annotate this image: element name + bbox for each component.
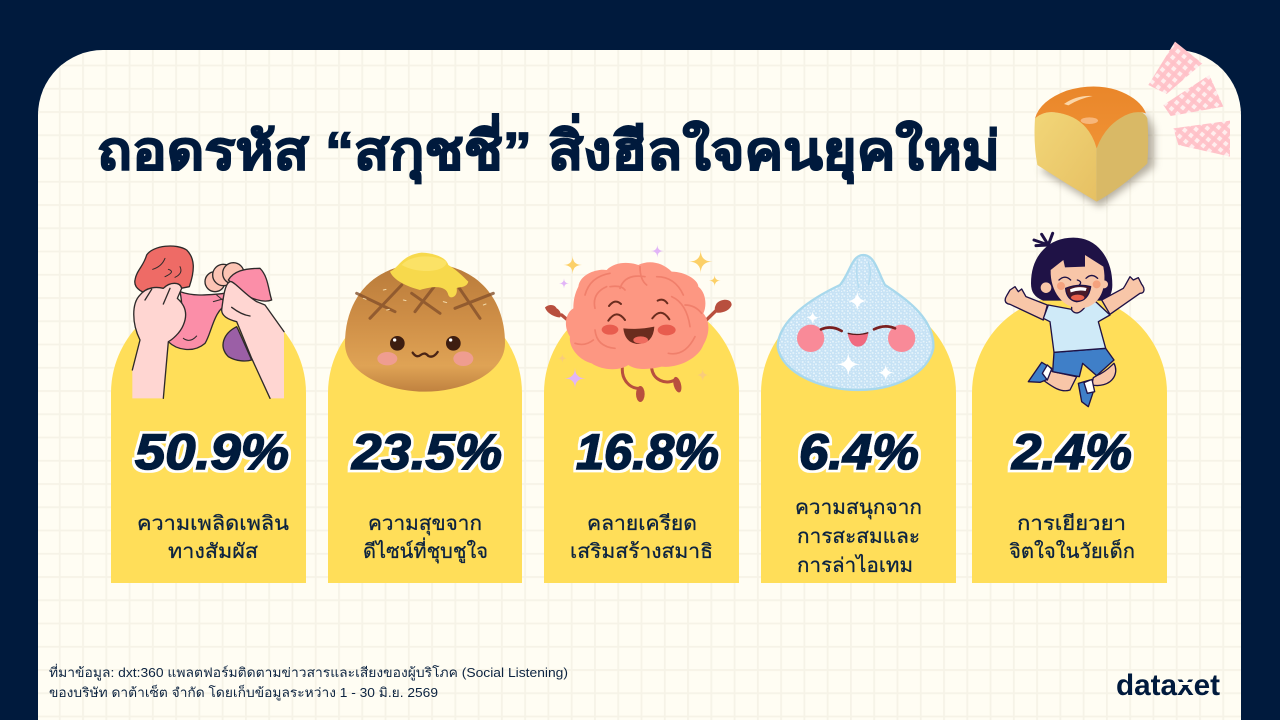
label: childhood healing: จิตใจในวัยเด็ก [1009, 538, 1135, 563]
source note: ของบริษัท ดาต้าเซ็ต จำกัด โดยเก็บข้อมูลระหว่าง 1 - 30 มิ.ย. 2569 [49, 683, 438, 701]
logo: dataxet: dataxet [1116, 669, 1220, 702]
label: stress relief: เสริมสร้างสมาธิ [570, 541, 713, 563]
panel: card 1 tactile pleasure [111, 246, 306, 583]
label: stress relief: คลายเครียด [587, 513, 697, 535]
label: healing design: ความสุขจาก [368, 513, 482, 536]
icon: melon bun with butter [345, 253, 505, 392]
stat: 16.8%: 16.8% [576, 424, 719, 480]
source note: ที่มาข้อมูล: dxt:360 แพลตฟอร์มติดตามข่าวสารและเสียงของผู้บริโภค (Social Listening) [49, 664, 568, 681]
icon: glitter dumpling [778, 255, 933, 390]
stat: 2.4%: 2.4% [1011, 424, 1132, 480]
panel: card 5 childhood healing [972, 233, 1167, 583]
source note [49, 664, 568, 701]
icon: jumping child [1005, 233, 1144, 407]
decoration: pink gingham rays [1148, 42, 1230, 157]
label: childhood healing: การเยียวยา [1017, 513, 1126, 535]
stat: 6.4%: 6.4% [799, 424, 919, 480]
panel: card 4 collecting fun [761, 255, 956, 583]
title: ถอดรหัส “สกุชชี่” สิ่งฮีลใจคนยุคใหม่ [97, 113, 1000, 184]
icon: bread loaf squishy [1035, 86, 1154, 207]
label: healing design: ดีไซน์ที่ชุบชูใจ [363, 537, 488, 564]
label: healing design [363, 513, 488, 564]
label: tactile pleasure: ความเพลิดเพลิน [137, 513, 289, 535]
label: stress relief [570, 513, 713, 563]
panel: card 2 healing design [328, 253, 522, 583]
label: collecting fun: การสะสมและ [797, 526, 920, 548]
label: childhood healing [1009, 513, 1135, 563]
stat: 50.9%: 50.9% [135, 424, 289, 480]
label: tactile pleasure: ทางสัมผัส [168, 541, 258, 563]
label: collecting fun: ความสนุกจาก [795, 497, 922, 520]
label: collecting fun [795, 497, 922, 577]
label: tactile pleasure [137, 513, 289, 563]
icon: hands stretching slime [132, 246, 284, 398]
panel: card 3 stress relief [544, 244, 739, 583]
stat: 23.5%: 23.5% [351, 424, 502, 480]
label: collecting fun: การล่าไอเทม [797, 554, 913, 577]
icon: happy brain with sparkles [545, 244, 732, 402]
